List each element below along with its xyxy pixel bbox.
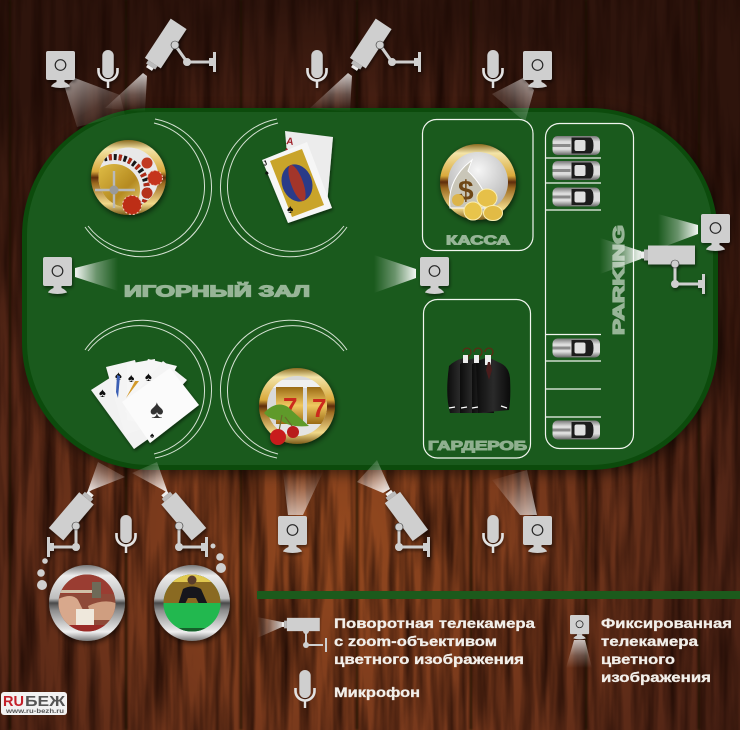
legend icon: rotating camera — [257, 617, 327, 652]
dots leading to cheating photo — [37, 558, 48, 590]
room outlines: cashier, cloakroom, parking — [422, 120, 634, 458]
fixed camera bottom right — [492, 470, 552, 553]
rotating camera right — [600, 238, 705, 294]
fixed camera top right — [492, 51, 552, 122]
legend icon: fixed camera — [566, 615, 592, 668]
legend text: rotating camera: цветного изображения — [334, 652, 524, 667]
rotating camera bottom third — [357, 460, 430, 557]
rotating camera bottom left — [47, 462, 125, 557]
playing cards: blackjack: A — [286, 136, 294, 148]
playing cards: royal flush: ♠ — [150, 431, 155, 440]
camera group: top left fixed camera — [46, 51, 125, 127]
rotating camera top center — [310, 19, 421, 112]
playing cards: blackjack: J — [262, 160, 268, 168]
legend text: rotating camera: с zoom-объективом — [334, 634, 497, 649]
fixed camera right — [658, 214, 730, 251]
rotating camera top left — [105, 19, 216, 112]
medallion: roulette — [81, 140, 166, 223]
legend text: rotating camera: Поворотная телекамера — [334, 616, 536, 631]
playing cards: royal flush: ♠ — [128, 371, 135, 385]
legend text: fixed camera: Фиксированная — [601, 616, 732, 631]
fixed camera bottom center — [278, 472, 323, 553]
logo: www.ru-bezh.ru — [5, 708, 64, 715]
legend text: fixed camera: изображения — [601, 670, 711, 685]
photo medallion: hands with cards — [49, 565, 125, 641]
logo: БЕЖ — [25, 694, 66, 710]
playing cards: royal flush — [91, 359, 199, 449]
casino table floor plan — [22, 108, 720, 474]
legend icon: microphone — [296, 670, 314, 708]
legend divider — [257, 591, 740, 599]
microphone top center — [308, 50, 326, 88]
microphone top right — [484, 50, 502, 88]
playing cards: blackjack — [262, 131, 333, 223]
game area arcs — [85, 119, 347, 458]
heading: parking: PARKING — [611, 225, 628, 335]
microphone bottom left — [116, 515, 136, 553]
playing cards: royal flush: ♠ — [145, 369, 152, 384]
playing cards: blackjack: ♠ — [287, 202, 294, 216]
heading: cashier: КАССА — [446, 234, 510, 248]
fixed camera hall center — [374, 255, 449, 294]
medallion: cashier money bag: $ — [458, 175, 474, 206]
dots leading to dealer photo — [210, 544, 226, 573]
fixed camera hall left — [43, 257, 118, 294]
parked cars — [552, 136, 600, 440]
medallion: slot machine: 7 — [312, 393, 326, 423]
medallion: slot machine — [259, 368, 335, 445]
legend text: rotating camera — [334, 616, 536, 667]
legend text: fixed camera: цветного — [601, 652, 675, 667]
playing cards: royal flush: ♠ — [115, 368, 122, 383]
legend text: fixed camera — [601, 616, 732, 685]
medallion: slot machine: 7 — [283, 392, 297, 422]
logo — [1, 692, 67, 715]
playing cards: royal flush: ♠ — [150, 394, 164, 424]
heading: cloakroom: ГАРДЕРОБ — [428, 439, 527, 453]
legend text: fixed camera: телекамера — [601, 634, 699, 649]
microphone bottom right — [484, 515, 502, 553]
logo: RU — [3, 694, 24, 710]
heading: gaming hall: ИГОРНЫЙ ЗАЛ — [124, 282, 310, 300]
playing cards: blackjack: ♦ — [285, 147, 289, 154]
playing cards: blackjack: ♠ — [265, 170, 269, 177]
photo medallion: dealer at green table — [154, 565, 230, 641]
medallion: cashier money bag — [440, 144, 516, 220]
legend text: microphone: Микрофон — [334, 685, 420, 700]
playing cards: royal flush: ♠ — [99, 385, 106, 400]
microphone top left — [98, 50, 118, 88]
rotating camera bottom second — [132, 462, 208, 557]
playing cards: blackjack: ♠ — [296, 151, 303, 166]
suits on hangers — [447, 348, 510, 413]
